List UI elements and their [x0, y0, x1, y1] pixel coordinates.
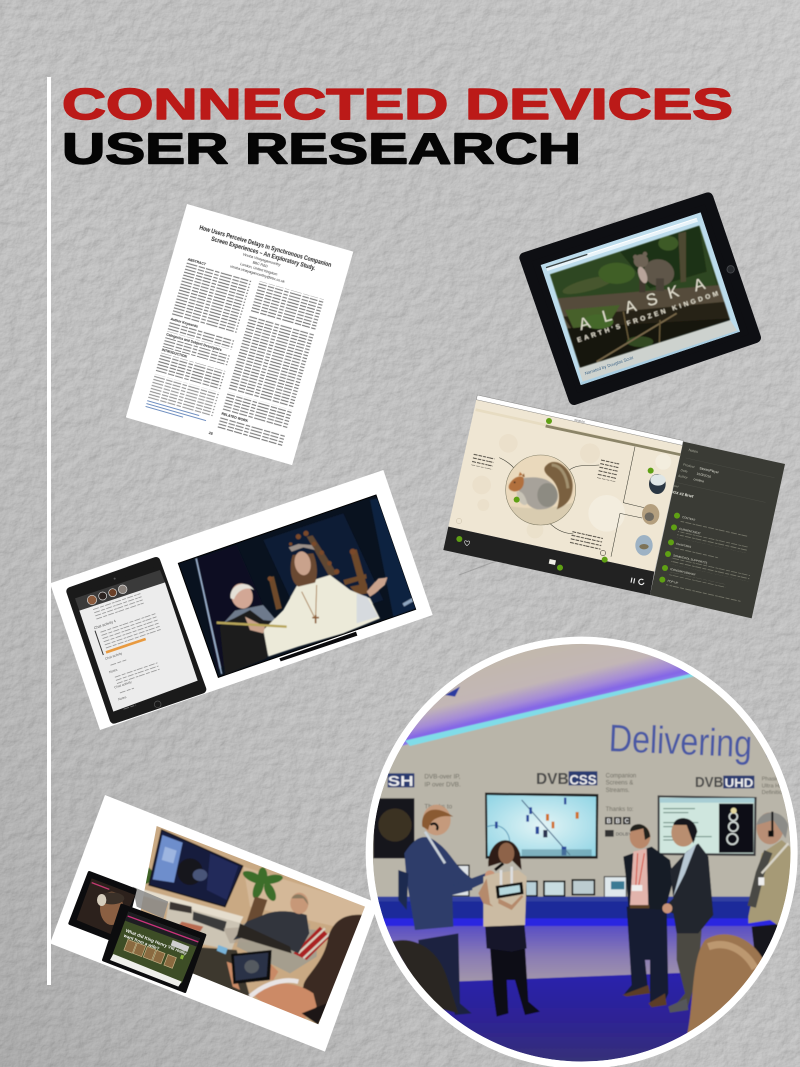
companion screens note: Streams.: [606, 788, 630, 794]
paper left column: [146, 257, 253, 425]
paper title: How Users Perceive Delays in Synchronous Companion: [198, 224, 332, 269]
BBC and Dolby logos: DOLBY: [616, 831, 631, 836]
pause and replay icons: [631, 578, 644, 585]
paper authors: London, United Kingdom: [240, 262, 278, 277]
circular photo: DVB stand demonstration: [365, 637, 800, 1067]
notes side panel: Date: [680, 468, 688, 474]
white vertical rule: [47, 77, 51, 985]
DVB over IP note: IP over DVB.: [424, 782, 461, 789]
foreground audience heads: [392, 934, 767, 1043]
paper authors: BBC R&D: [252, 260, 269, 269]
DVB-CSS logo: CSS: [569, 771, 597, 787]
Alaska lettering: EARTH'S FROZEN KINGDOM: [576, 290, 720, 344]
phasing note: Phasing: [762, 776, 782, 782]
side plants: [146, 867, 152, 884]
annotation key list: SOME/COOL SUPPORT(?): [673, 553, 708, 565]
DVB-UHD logo: [695, 775, 755, 789]
heart icon: [465, 541, 470, 546]
DVB-UHD logo: UHD: [725, 776, 753, 790]
quiz portrait choices: [124, 939, 176, 968]
fallen log: [557, 285, 730, 328]
tablet with chat questions: [71, 561, 202, 719]
title: [62, 80, 733, 174]
throne: [268, 535, 368, 610]
purple lit ceiling: [398, 640, 698, 747]
notes side panel: Brief: [673, 484, 679, 489]
photo white ring: [369, 640, 794, 1065]
companion screens note: Screens &: [606, 781, 633, 787]
paper page number: 28: [208, 431, 213, 436]
paper left column: Categories and Subject Descriptors: [166, 332, 222, 352]
chat transcript: Notes: [117, 695, 127, 702]
chat transcript: Chat activity: [114, 680, 132, 690]
panel: squirrel companion screen wireframe: [443, 395, 785, 618]
phasing note: Ultra High: [762, 783, 787, 789]
connector lines: [499, 447, 644, 557]
TV frame with theatre stage: [178, 490, 420, 677]
annotation key list: CONTENT: [682, 515, 696, 522]
notes side panel: cristina: [693, 477, 705, 483]
slide TV: [658, 795, 757, 856]
notes side panel: Product: [683, 463, 695, 469]
chat transcript: Chat activity: [104, 651, 123, 661]
foreground woman: [302, 914, 362, 1020]
info circle: [600, 550, 606, 556]
player footer: [443, 527, 654, 595]
caption strip under the photo: [578, 320, 737, 382]
chat transcript: Chat activity 4: [93, 619, 116, 630]
progress bar: [475, 408, 681, 456]
person: man in charcoal jacket: [662, 818, 713, 1013]
notes side panel: 15/3/2016: [696, 472, 712, 479]
green annotation markers: [456, 418, 654, 571]
DVB-UHD logo: DVB: [695, 775, 723, 791]
top status bar: [476, 395, 683, 445]
annotation key list: POP-UP: [667, 579, 679, 585]
tablet body: [525, 198, 756, 400]
quiz question text: What did King Henry VIII really: [125, 928, 188, 956]
BBC and Dolby logos: [605, 817, 631, 837]
panel: tablet and TV theatre companion scene: [50, 470, 433, 730]
annotation key list: CURRENT/NEXT: [679, 527, 702, 536]
paper right column: RELATED WORK: [221, 412, 249, 423]
exhibition wall: [372, 676, 790, 898]
chat transcript: [93, 592, 162, 711]
paper left column: Author Keywords: [170, 317, 199, 329]
blue counter and floor: [378, 900, 752, 920]
living room photograph: [140, 826, 365, 1024]
paper left column: INTRODUCTION: [161, 348, 188, 359]
glass reflection between tablets: [133, 887, 168, 918]
annotation key list: [659, 513, 750, 603]
notes side panel: CGX #2 Brief: [670, 490, 694, 499]
home button: [727, 266, 734, 273]
chapter thumbnails: [635, 474, 666, 556]
BBC and Dolby logos: B: [607, 819, 612, 825]
paper authors: Vinoba Vinayagamoorthy: [242, 252, 281, 267]
paper left column: ABSTRACT: [187, 257, 207, 267]
companion screens note: [606, 773, 636, 813]
BBC and Dolby logos: B: [616, 819, 621, 825]
forest photograph: [549, 225, 731, 368]
paper title: Screen Experiences – An Exploratory Study.: [210, 236, 316, 272]
left dark screen: [373, 798, 414, 858]
panel: research paper page: [126, 204, 353, 465]
Alaska lettering: ALASKA: [577, 274, 708, 334]
notes side panel: StoriesPlayer: [699, 466, 720, 475]
DVB-CSS logo: [536, 771, 597, 788]
paper right column: [217, 281, 324, 447]
person: man in khaki jacket: [748, 812, 798, 973]
bear: [633, 252, 677, 292]
coffee table gadget: [217, 945, 228, 954]
panel: squirrel companion screen wireframe: 00:00:00: [574, 418, 586, 424]
small device row on counter: [448, 865, 626, 897]
TV unit: [144, 889, 244, 924]
gold sceptre: [217, 623, 287, 627]
hands: [367, 577, 387, 597]
DVB over IP note: [424, 774, 461, 810]
DVB-DASH logo fragment: SH: [388, 774, 414, 790]
illustration: grey squirrel: [505, 454, 576, 526]
rear tablet with portrait: [70, 873, 135, 943]
notes side panel: Author: [678, 474, 689, 480]
notes side panel: [650, 442, 785, 618]
companion screens note: Thanks to:: [606, 807, 634, 813]
companion screens note: Companion: [606, 773, 636, 779]
paper authors: vinoba.vinayagamoorthy@bbc.co.uk: [230, 264, 285, 284]
circular photo: DVB stand demonstration: t: [763, 723, 774, 766]
title: USER RESEARCH: [62, 124, 581, 174]
annotation key list: ICONS/MYLIBRARY: [670, 567, 696, 577]
actor in white robe: [263, 575, 380, 657]
DVB over IP note: Thanks to: [424, 803, 453, 810]
phasing note: Definition.: [762, 790, 787, 796]
DVB-CSS logo: DVB: [536, 771, 569, 788]
person: presenter holding tablet: [478, 840, 540, 1017]
person: man in blue suit: [398, 805, 503, 1015]
annotation key list: CHAPTERS: [676, 542, 692, 549]
caption blocks: [471, 453, 620, 552]
front tablet with quiz question: want from a wife?: [122, 933, 160, 951]
panel: living room viewing study: [50, 795, 378, 1052]
tablet screen: [541, 212, 740, 385]
seated man: [233, 911, 309, 953]
notes side panel: Notes: [688, 448, 698, 454]
hands and held tablet: [227, 962, 278, 990]
main TV screen: [149, 830, 243, 907]
panel: tablet showing Alaska title screen: [525, 198, 756, 400]
Delivering wall headline: Delivering: [608, 717, 753, 766]
ice hockey TV: [485, 793, 598, 859]
person: man in navy blazer: [622, 824, 673, 1007]
TV stand: [279, 632, 357, 661]
title: CONNECTED DEVICES: [62, 80, 733, 129]
front tablet with quiz question: [103, 905, 205, 992]
BBC and Dolby logos: C: [625, 819, 630, 825]
narrator caption: Narrated by Douglas Scott: [584, 355, 635, 376]
chat avatars: [87, 585, 127, 605]
captions icon: [549, 559, 556, 565]
floor and sofa: [190, 947, 250, 997]
cream story page: [448, 395, 683, 572]
DVB over IP note: DVB-over IP,: [424, 774, 461, 781]
paper authors: [230, 250, 289, 284]
old man in dark robe: [220, 605, 277, 675]
phasing note: [762, 776, 782, 794]
chat transcript: Notes: [108, 668, 118, 674]
